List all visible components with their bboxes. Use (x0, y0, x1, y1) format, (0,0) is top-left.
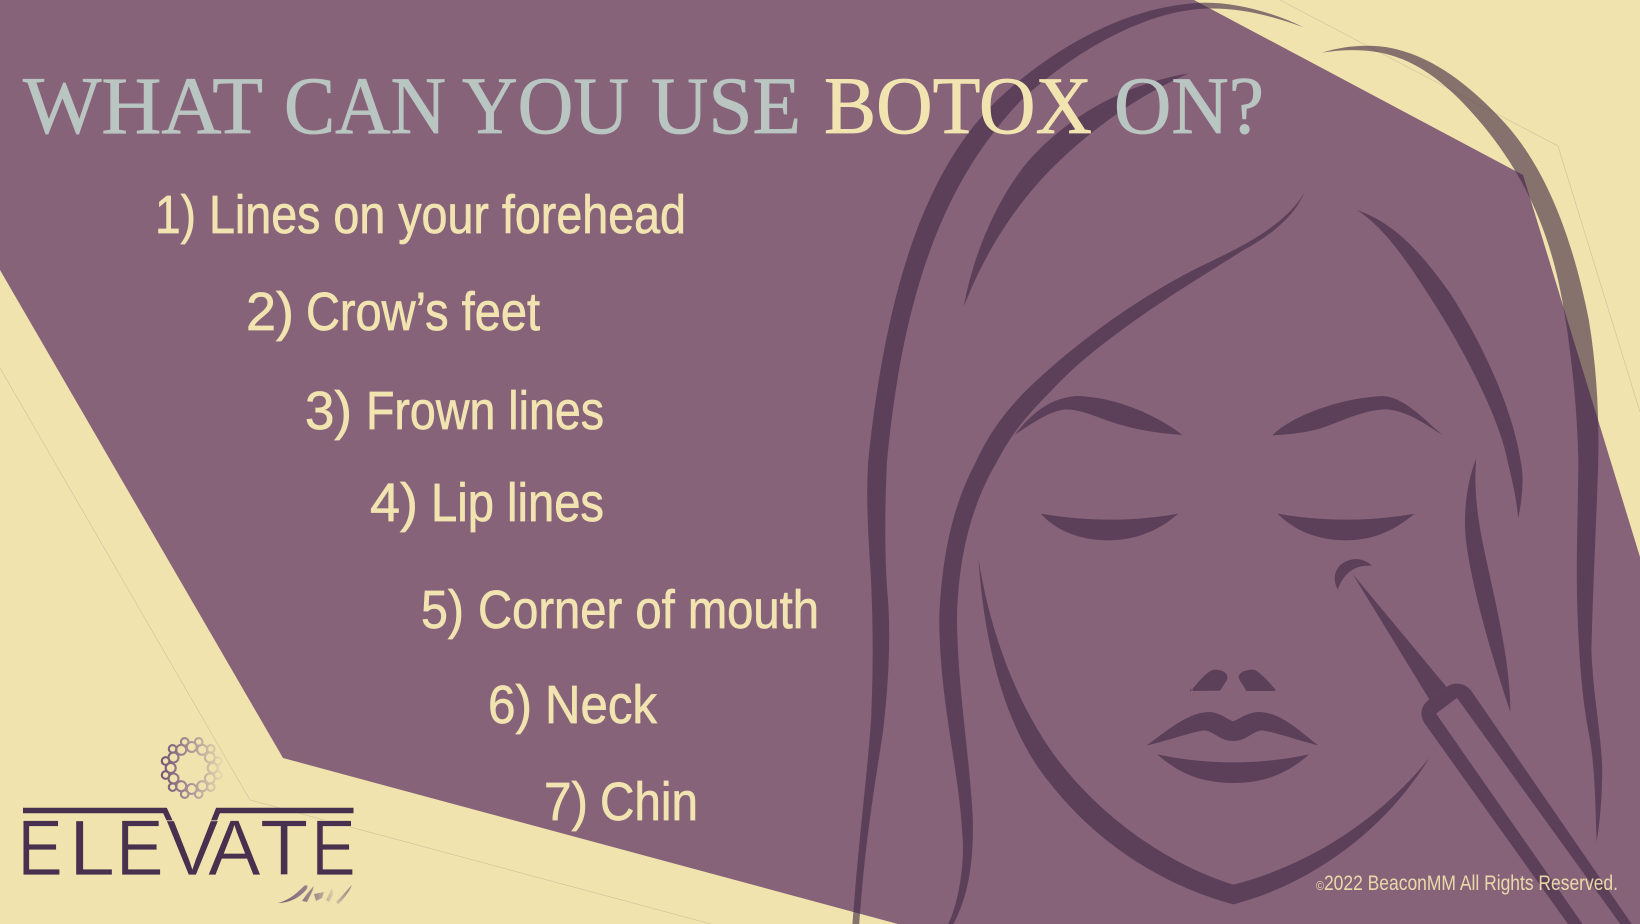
wrinkle mark on cheek (1335, 559, 1372, 590)
hair: right cheek strand (1465, 458, 1510, 712)
item 5: Corner of mouth (478, 580, 819, 640)
hair: outer right strand (1322, 46, 1602, 842)
right eyebrow (1272, 396, 1442, 435)
left closed eye (1041, 514, 1178, 540)
title: highlighted word: BOTOX (824, 60, 1092, 151)
logo wordmark: E (116, 803, 164, 892)
item 3: 3) (305, 381, 352, 441)
item 4: Lip lines (431, 473, 604, 533)
illustration: woman's face with injection (852, 3, 1632, 924)
item 4 (370, 473, 604, 533)
item 6: 6) (488, 675, 532, 735)
logo wordmark: T (260, 803, 308, 892)
needle (1352, 574, 1447, 699)
item 1: 1) (155, 185, 196, 245)
title: word USE: USE (651, 60, 801, 151)
left nostril (1190, 670, 1227, 692)
logo wordmark: V (166, 803, 219, 892)
item 2: 2) (246, 282, 294, 342)
list of treatment areas (155, 185, 819, 832)
jaw and chin line (978, 559, 1429, 904)
item 6: Neck (545, 675, 658, 735)
logo wordmark: L (69, 803, 115, 892)
lower lip (1157, 754, 1309, 783)
title: word CAN: CAN (284, 60, 446, 151)
logo mandala (162, 738, 222, 798)
item 1: Lines on your forehead (209, 185, 686, 245)
right closed eye (1278, 514, 1415, 540)
logo wordmark: E (18, 803, 63, 892)
title: word WHAT: WHAT (23, 60, 263, 151)
hair: right inner strand (1357, 210, 1523, 519)
logo top bars (23, 810, 354, 828)
logo wordmark: A (208, 803, 261, 892)
item 4: 4) (370, 473, 418, 533)
item 6 (488, 675, 658, 735)
item 7: Chin (600, 772, 698, 832)
hair: fringe strand (939, 192, 1305, 924)
logo wordmark: E (312, 803, 356, 892)
logo: Elevate (18, 738, 355, 904)
logo signature flourish (278, 885, 352, 904)
syringe body (1421, 684, 1632, 924)
hair: inner top strand (964, 73, 1189, 307)
right nostril (1238, 670, 1276, 691)
title: word YOU: YOU (462, 60, 629, 151)
title (23, 60, 1264, 151)
item 5: 5) (421, 580, 464, 640)
title: end part: ON? (1114, 60, 1264, 151)
item 7 (544, 772, 698, 832)
item 2: Crow’s feet (306, 282, 540, 342)
upper lip (1147, 712, 1318, 745)
item 3: Frown lines (366, 381, 604, 441)
hair: outer left strand (852, 3, 1304, 924)
item 7: 7) (544, 772, 588, 832)
left eyebrow (1015, 396, 1182, 435)
